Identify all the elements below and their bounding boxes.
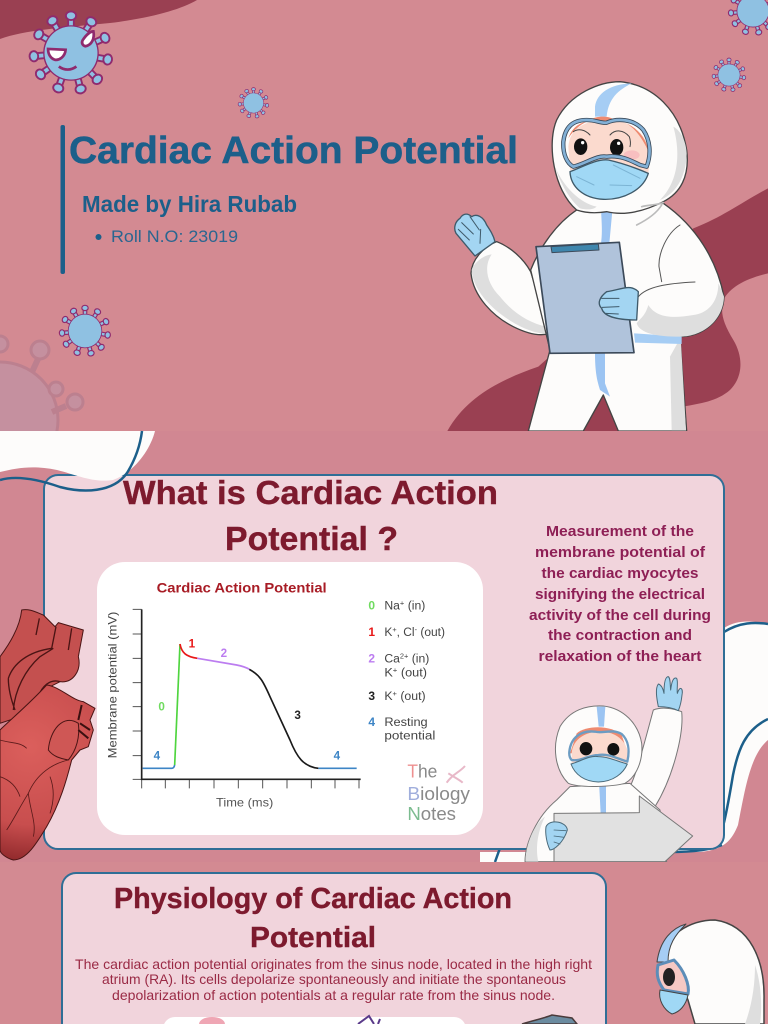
physiology image card bbox=[163, 1016, 466, 1024]
lower zip bbox=[595, 353, 610, 397]
physiology body text bbox=[75, 956, 592, 1003]
blue curve top-left bbox=[0, 431, 142, 490]
virus: small centre bbox=[238, 88, 269, 118]
logo: the biology notes bbox=[407, 760, 471, 824]
definition text: Measurement of the bbox=[546, 523, 694, 540]
gripping glove fingers bbox=[554, 830, 566, 844]
logo: the biology notes: The bbox=[407, 760, 437, 781]
chart card bbox=[97, 562, 483, 835]
phase labels bbox=[154, 638, 341, 762]
hood shade bbox=[745, 965, 761, 1024]
virus: top right corner bbox=[728, 0, 768, 36]
heading: what is: What is Cardiac Action bbox=[123, 474, 498, 511]
legend: 2+ bbox=[400, 652, 408, 661]
white blob top-left bbox=[0, 431, 155, 481]
panel: physiology bbox=[62, 873, 606, 1024]
legend: + bbox=[400, 598, 404, 607]
phase labels: 0 bbox=[158, 700, 165, 713]
phase labels: 4 bbox=[154, 749, 161, 762]
legend: - bbox=[415, 625, 418, 634]
left arm bbox=[471, 242, 550, 335]
physiology body text: The cardiac action potential originates from the sinus node, located in the high right bbox=[75, 956, 592, 972]
mask folds bbox=[577, 165, 640, 186]
repolarisation phase bbox=[249, 669, 318, 768]
left eye bbox=[574, 138, 587, 155]
ghost virus bottom-left bbox=[0, 336, 83, 478]
vessel ends bbox=[78, 705, 90, 738]
right eye bbox=[610, 139, 623, 156]
glove fingers bbox=[602, 298, 619, 314]
coronary vessels bbox=[0, 740, 68, 837]
definition text: activity of the cell during bbox=[529, 607, 711, 624]
brows bbox=[573, 130, 630, 147]
legend: (out) bbox=[417, 625, 445, 639]
gripping glove bbox=[546, 822, 567, 850]
raised glove bbox=[656, 677, 682, 711]
depolarisation phase bbox=[175, 644, 180, 765]
definition text: membrane potential of bbox=[535, 544, 706, 561]
hood zip bbox=[597, 707, 605, 727]
heading: physiology: Physiology of Cardiac Action bbox=[114, 883, 512, 915]
logo: the biology notes: Notes bbox=[407, 803, 456, 824]
legend: + bbox=[392, 625, 397, 634]
suit torso bbox=[528, 203, 724, 431]
goggles bbox=[563, 120, 650, 167]
physiology body text: atrium (RA). Its cells depolarize spontaneously and initiate the spontaneous bbox=[102, 971, 566, 987]
waving glove bbox=[455, 214, 495, 256]
chart title: Cardiac Action Potential bbox=[157, 581, 327, 596]
mask bbox=[571, 756, 627, 782]
hair bbox=[570, 727, 627, 753]
legend: K bbox=[384, 689, 392, 703]
illustration: dark swoosh and health worker with clipboard bbox=[447, 82, 768, 431]
legend: Resting bbox=[384, 715, 428, 729]
legend: 4 bbox=[368, 715, 375, 729]
hood bbox=[555, 706, 642, 786]
vessels silhouette bbox=[0, 610, 83, 723]
clipboard bbox=[536, 242, 634, 353]
early repolarisation phase bbox=[180, 644, 197, 658]
legend: (in) bbox=[408, 652, 429, 666]
legend: potential bbox=[384, 728, 435, 742]
legend: Ca bbox=[384, 652, 400, 666]
heart body bbox=[0, 685, 95, 860]
hood zip bbox=[595, 83, 632, 117]
blue curve right bbox=[495, 623, 768, 862]
definition text: relaxation of the heart bbox=[538, 648, 702, 665]
raised arm bbox=[630, 708, 682, 807]
definition text bbox=[529, 523, 711, 665]
virus: face top-left bbox=[29, 11, 113, 94]
legend: 3 bbox=[368, 689, 375, 703]
resting phase bbox=[143, 765, 357, 768]
hair bbox=[568, 117, 649, 153]
legend: 1 bbox=[368, 625, 375, 639]
phase labels: 1 bbox=[189, 638, 196, 651]
heading: what is bbox=[123, 474, 498, 557]
legend: (in) bbox=[404, 598, 425, 612]
mask bbox=[660, 990, 688, 1014]
clipboard clip bbox=[551, 244, 599, 253]
atrium shading bbox=[48, 720, 79, 760]
logo: the biology notes: Biology bbox=[407, 783, 471, 804]
legend bbox=[368, 598, 445, 742]
legend: + bbox=[393, 689, 397, 698]
axes bbox=[142, 609, 361, 779]
roll number: Roll N.O: 23019 bbox=[111, 227, 238, 246]
decorative dark blob top-left bbox=[0, 0, 197, 39]
neck folds bbox=[637, 203, 663, 225]
small worker head at panel edge bbox=[522, 1015, 577, 1024]
holding glove bbox=[599, 288, 638, 320]
physiology body text: depolarization of action potentials at a regular rate from the sinus node. bbox=[112, 987, 555, 1003]
body shade bbox=[526, 817, 545, 862]
hood zip bbox=[657, 924, 686, 962]
phase labels: 4 bbox=[334, 749, 341, 762]
definition text: signifying the electrical bbox=[535, 586, 705, 603]
definition text: the contraction and bbox=[548, 627, 692, 644]
face bbox=[572, 732, 628, 765]
definition text: the cardiac myocytes bbox=[542, 565, 698, 582]
left arm shade bbox=[472, 254, 548, 334]
eyes bbox=[580, 742, 619, 756]
chest zip bbox=[599, 782, 606, 813]
cheek bbox=[624, 150, 640, 160]
legend: (out) bbox=[397, 665, 427, 679]
health worker side view bbox=[657, 920, 764, 1024]
hood shade bbox=[555, 127, 687, 209]
leg shade bbox=[670, 337, 686, 430]
slide two background bbox=[0, 431, 768, 862]
slide three background bbox=[0, 862, 768, 1024]
legend: , Cl bbox=[397, 625, 415, 639]
mask bbox=[570, 160, 648, 199]
legend: 0 bbox=[368, 599, 375, 613]
heading: physiology: Potential bbox=[250, 922, 376, 954]
virus: medium left bbox=[59, 305, 111, 357]
legend: (out) bbox=[397, 689, 426, 703]
hood bbox=[660, 920, 764, 1024]
phase labels: 3 bbox=[294, 709, 301, 722]
waist band bbox=[634, 333, 682, 344]
white blob right bbox=[480, 622, 768, 862]
axis ticks bbox=[133, 609, 359, 788]
goggles bbox=[569, 731, 629, 762]
waving glove fingers bbox=[458, 217, 481, 243]
upper zip bbox=[601, 200, 613, 243]
phase labels: 2 bbox=[221, 647, 228, 660]
arrow sign bbox=[554, 796, 693, 862]
chart: cardiac action potential bbox=[107, 581, 471, 824]
dark swoosh bbox=[447, 188, 768, 431]
heading: physiology bbox=[114, 883, 512, 954]
legend: K bbox=[384, 665, 392, 679]
sleeve creases bbox=[638, 225, 695, 297]
hood bbox=[552, 82, 687, 213]
heart illustration bbox=[0, 610, 95, 860]
legend: + bbox=[393, 665, 397, 674]
x axis label: Time (ms) bbox=[216, 797, 273, 810]
title: Cardiac Action Potential bbox=[69, 130, 518, 172]
plateau phase bbox=[197, 658, 249, 669]
author: Made by Hira Rubab bbox=[82, 191, 297, 217]
virus: top right small bbox=[712, 58, 746, 92]
health worker raising hand bbox=[525, 677, 693, 862]
title accent bar bbox=[60, 125, 65, 274]
suit body bbox=[525, 783, 667, 862]
y axis label: Membrane potential (mV) bbox=[107, 612, 120, 758]
eye bbox=[663, 968, 675, 986]
panel: what is cardiac action potential bbox=[44, 475, 724, 849]
legend: 2 bbox=[368, 652, 375, 666]
face and goggle bbox=[657, 960, 688, 994]
legend: Na bbox=[384, 598, 400, 612]
vessel dividers bbox=[8, 618, 72, 710]
legend: K bbox=[384, 625, 392, 639]
face bbox=[568, 120, 650, 173]
heading: what is: Potential ? bbox=[225, 520, 398, 557]
right sleeve shade bbox=[637, 283, 724, 337]
